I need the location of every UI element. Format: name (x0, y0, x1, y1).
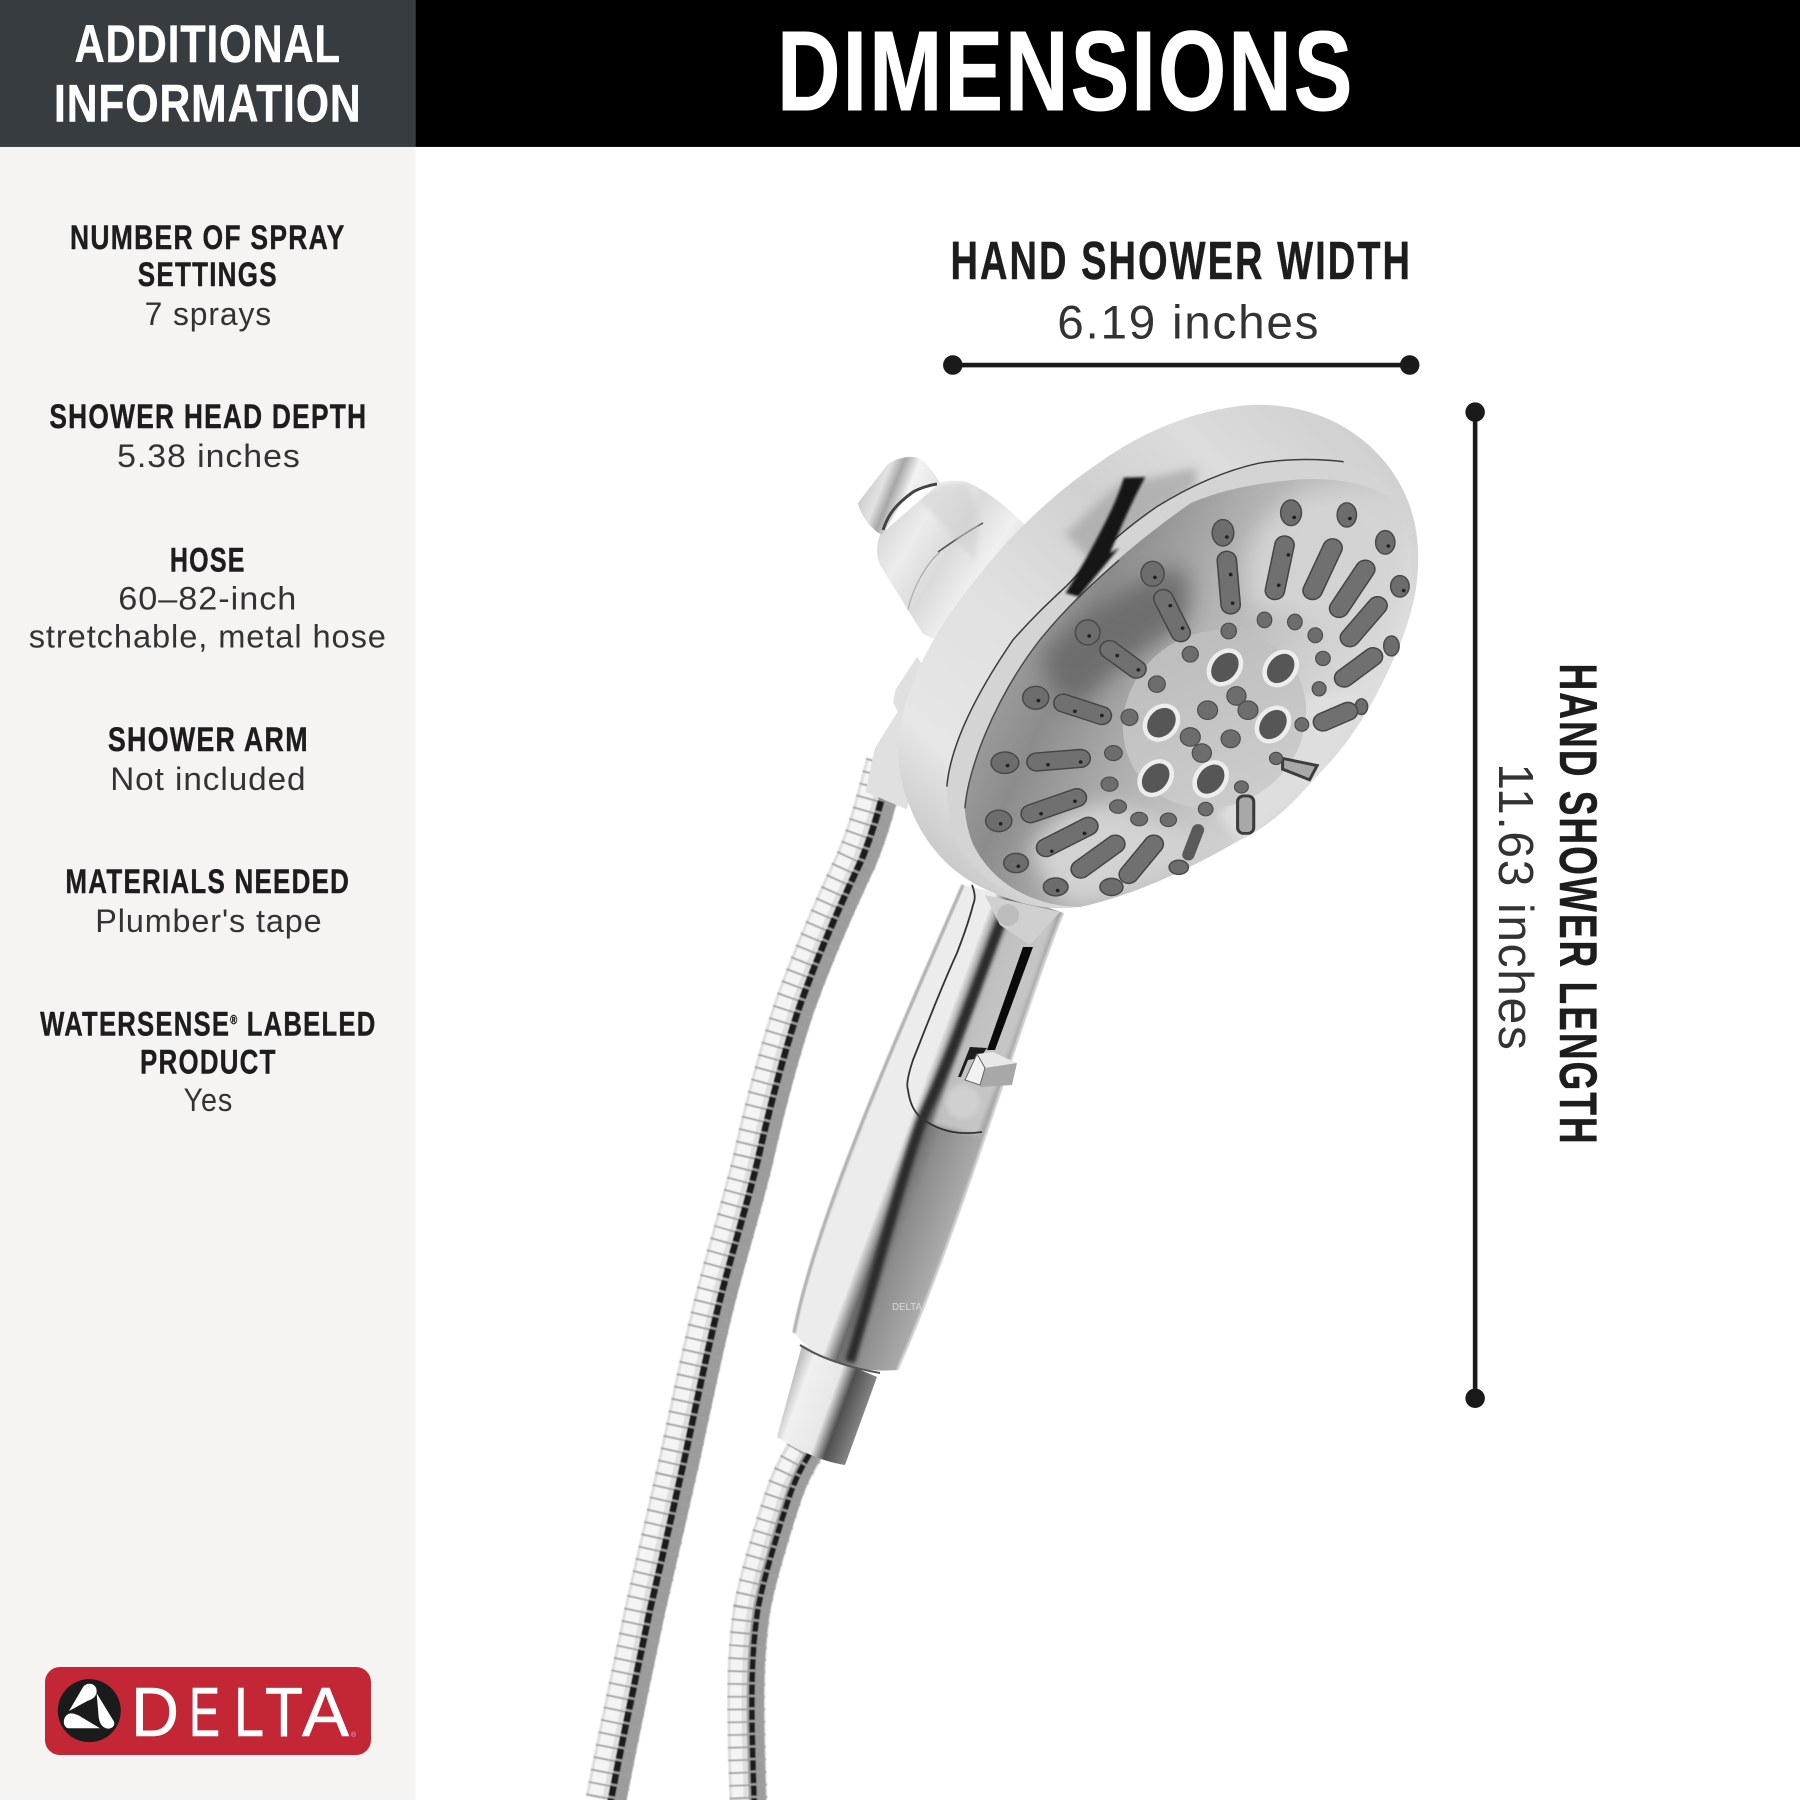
ring outer line (947, 459, 1344, 787)
ring band (947, 459, 1402, 907)
logo: delta: A (302, 1673, 349, 1751)
logo: delta: L (234, 1673, 264, 1751)
handle dark reflection band (850, 920, 1002, 1362)
handle slot (987, 947, 1033, 1050)
logo: delta: T (265, 1673, 303, 1751)
panel: additional information sidebar (0, 0, 416, 1800)
spec: hose: stretchable, metal hose (29, 617, 387, 654)
small nozzles (1101, 612, 1330, 827)
spec: watersense labeled product (40, 1005, 377, 1118)
grip right edge shade (897, 913, 1063, 1370)
nozzle pins (999, 516, 1406, 892)
logo: delta: ® (351, 1731, 357, 1739)
hose: left (596, 760, 897, 1800)
upper right lighter panel (932, 917, 1056, 1135)
grip left edge shade (794, 885, 963, 1333)
dimension: hand shower width: 6.19 inches (1057, 296, 1320, 349)
narrow nozzle (1188, 830, 1198, 855)
large ring nozzles (1133, 645, 1303, 801)
spec: materials needed: Plumber's tape (95, 902, 323, 939)
sidebar header: ADDITIONAL (75, 15, 341, 74)
product: shower head with hose (596, 405, 1418, 1800)
dimension: hand shower width: HAND SHOWER WIDTH (951, 231, 1412, 291)
neck behind head (866, 657, 936, 809)
hose: right (736, 1441, 820, 1800)
spec: hose: 60–82-inch (118, 580, 297, 617)
dimension: hand shower length (1465, 402, 1607, 1408)
handle grip (794, 885, 1063, 1371)
handle (777, 885, 1063, 1465)
face edge line (965, 560, 1119, 808)
edge outlined nozzles (1238, 758, 1317, 833)
outer round nozzles (986, 500, 1409, 896)
spec: watersense labeled product: Yes (184, 1081, 233, 1118)
spec: number of spray settings: SETTINGS (138, 256, 278, 294)
handle paddle outline (907, 885, 982, 1133)
spec: materials needed: MATERIALS NEEDED (65, 863, 350, 901)
sidebar header: INFORMATION (54, 75, 362, 134)
spec: number of spray settings: NUMBER OF SPRAY (70, 219, 346, 257)
handle taper (777, 1345, 877, 1465)
grey reflection beside streak (1065, 467, 1196, 558)
spec: materials needed (65, 863, 350, 939)
spec: number of spray settings: 7 sprays (145, 295, 272, 332)
spec: shower arm (108, 721, 309, 797)
dimension: hand shower length: HAND SHOWER LENGTH (1548, 664, 1607, 1146)
spec: watersense labeled product: ® (230, 1013, 238, 1027)
spec: hose (29, 542, 387, 654)
capsule nozzles fill (1031, 545, 1378, 874)
spec: shower head depth (49, 398, 367, 474)
face shading, clipped to face (1031, 490, 1400, 905)
spec: shower head depth: 5.38 inches (117, 437, 301, 474)
dimension: hand shower length: 11.63 inches (1488, 763, 1543, 1052)
logo: delta (45, 1667, 371, 1755)
logo: delta: E (189, 1673, 220, 1751)
spray lever (946, 1047, 1017, 1119)
title bar: dimensions (416, 0, 1800, 147)
title bar: dimensions: DIMENSIONS (777, 8, 1355, 135)
shower arm mount (858, 457, 1050, 650)
dimension: hand shower width (943, 231, 1419, 375)
spray face (965, 479, 1412, 907)
spec: number of spray settings (70, 219, 346, 332)
spec: shower head depth: SHOWER HEAD DEPTH (49, 398, 367, 436)
logo: delta: D (131, 1673, 179, 1751)
spec: shower arm: Not included (110, 760, 307, 797)
spec: watersense labeled product: PRODUCT (140, 1043, 277, 1081)
dark streak across the ring (1066, 477, 1145, 597)
inner disc (1088, 599, 1341, 840)
rim between grip and taper (800, 1345, 880, 1373)
head body and spray face (898, 405, 1418, 908)
spec: hose: HOSE (170, 542, 246, 580)
capsule nozzles outline (1031, 545, 1378, 874)
spec: shower arm: SHOWER ARM (108, 721, 309, 759)
head outer body (898, 405, 1418, 908)
spec: watersense labeled product: LABELED (238, 1005, 377, 1043)
sidebar header (0, 0, 416, 147)
spec: watersense labeled product: WATERSENSE (40, 1005, 291, 1043)
handle logo engraving: DELTA (892, 1302, 922, 1313)
joint knob (985, 895, 1060, 945)
